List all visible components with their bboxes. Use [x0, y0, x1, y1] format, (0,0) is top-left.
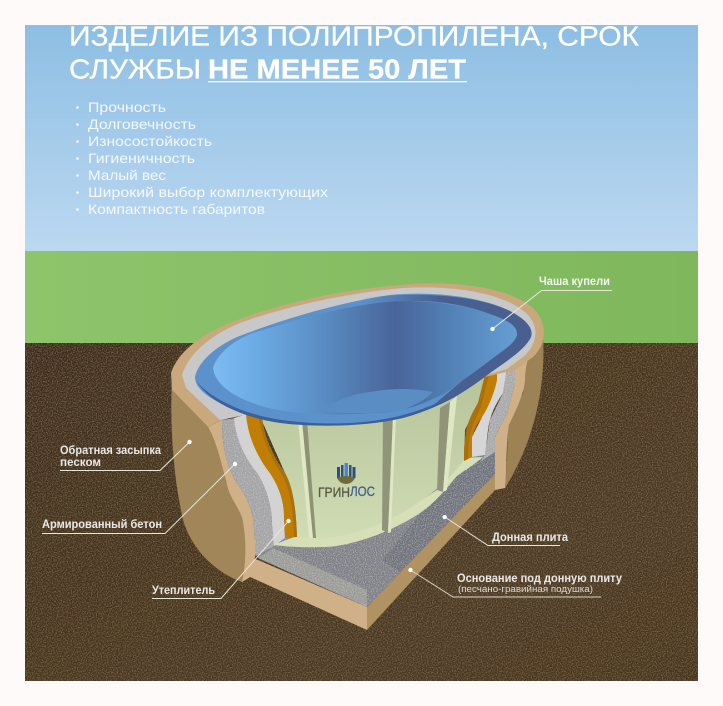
- grass: [25, 251, 698, 343]
- benefits list: Гигиеничность: [88, 150, 195, 166]
- left backfill body: [171, 375, 246, 582]
- floor: [273, 457, 483, 547]
- benefits list: Широкий выбор комплектующих: [88, 184, 328, 200]
- pool cross-section illustration: [171, 283, 544, 630]
- concrete rim: [182, 287, 535, 420]
- callout: slab foundation: [408, 568, 623, 597]
- title: НЕ МЕНЕЕ 50 ЛЕТ: [208, 54, 466, 84]
- callout: pool bowl: [490, 276, 612, 331]
- logo: ЛОС: [350, 483, 375, 499]
- callout: sand backfill: песком: [60, 457, 101, 469]
- pool rim: [195, 294, 532, 425]
- left insulation: [246, 414, 297, 538]
- benefits list: Долговечность: [88, 116, 196, 132]
- callout: pool bowl: Чаша купели: [539, 276, 610, 288]
- benefits list: Прочность: [88, 99, 166, 115]
- logo: ГРИН: [318, 484, 350, 500]
- left light sand strip: [208, 420, 256, 582]
- benefits list: Малый вес: [88, 167, 166, 183]
- right concrete wall: [480, 363, 515, 462]
- shell ribs: [298, 396, 457, 538]
- callout: slab foundation: Основание под донную плиту: [457, 573, 623, 585]
- callout: bottom slab: [442, 515, 569, 546]
- pool rim lower edge: [195, 373, 490, 426]
- callout: insulation: [152, 519, 291, 598]
- title: СЛУЖБЫ: [69, 54, 201, 84]
- right white layer: [472, 368, 507, 457]
- right insulation: [464, 366, 497, 461]
- pool rim dark top right: [360, 295, 532, 408]
- sand rim: [171, 283, 544, 427]
- benefits list: [76, 99, 328, 217]
- callout: sand backfill: Обратная засыпка: [60, 445, 162, 457]
- right light sand strip: [495, 347, 533, 490]
- callout: slab foundation: (песчано-гравийная подушка): [458, 584, 593, 594]
- left white layer: [234, 414, 285, 546]
- title: ИЗДЕЛИЕ ИЗ ПОЛИПРОПИЛЕНА, СРОК: [69, 20, 639, 52]
- ground: [25, 343, 698, 681]
- logo: [318, 463, 375, 500]
- sand base under slab: [242, 474, 495, 630]
- sky: [25, 25, 698, 251]
- benefits list: Компактность габаритов: [88, 201, 265, 217]
- pool basin: [213, 301, 517, 414]
- callout: reinforced concrete: [42, 462, 237, 534]
- logo icon: [337, 463, 356, 484]
- callout: bottom slab: Донная плита: [492, 532, 569, 544]
- left concrete wall: [222, 418, 274, 556]
- callout: sand backfill: [60, 440, 192, 470]
- pool floor: [317, 389, 433, 413]
- callout: reinforced concrete: Армированный бетон: [42, 519, 162, 531]
- title: [69, 20, 639, 84]
- benefits list: Износостойкость: [88, 133, 212, 149]
- concrete bottom slab: [255, 440, 495, 607]
- right backfill body: [505, 335, 543, 488]
- green shell walls: [258, 370, 490, 538]
- callout: insulation: Утеплитель: [152, 585, 215, 597]
